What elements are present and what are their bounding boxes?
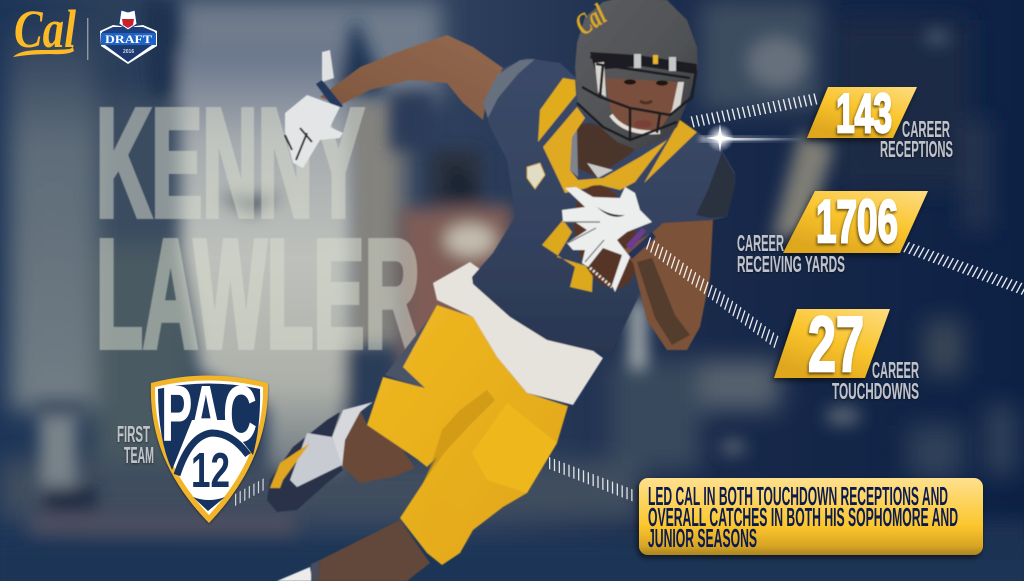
label career receiving yards (737, 230, 845, 277)
callout text (648, 481, 958, 553)
infographic canvas: CAREER (872, 357, 919, 383)
laces (590, 268, 612, 287)
label career touchdowns (832, 357, 919, 404)
label career receiving yards: RECEIVING YARDS (737, 251, 845, 277)
label career touchdowns: TOUCHDOWNS (832, 378, 919, 404)
dashed connector: receptions (692, 98, 820, 122)
stat: 143 career receptions (807, 82, 953, 162)
navy field (158, 384, 260, 470)
wristband (316, 80, 343, 110)
dashed connector: callout (549, 463, 635, 496)
helmet visor band (590, 52, 697, 74)
football (563, 178, 649, 296)
face (605, 78, 678, 133)
Pac-12 chest patch (527, 163, 545, 189)
right arm (623, 220, 713, 350)
12 numeral: 12 (191, 444, 230, 498)
cleat upper (290, 433, 342, 487)
left eye (624, 79, 636, 85)
mouth (634, 120, 652, 128)
player name: KENNY (96, 77, 364, 249)
back sock band (311, 560, 320, 581)
yellow shoulder panel left (538, 78, 576, 142)
number 1706: 1706 (816, 188, 898, 255)
callout text: JUNIOR SEASONS (648, 523, 757, 553)
label career receptions: CAREER (902, 116, 950, 142)
back shin (318, 520, 430, 581)
logo divider (87, 18, 88, 60)
cleat swoosh (270, 443, 310, 488)
collar (568, 130, 578, 177)
Cal logo: Cal (14, 0, 76, 59)
front shin (342, 410, 415, 483)
right eye (656, 80, 668, 86)
badge 143 (807, 87, 917, 138)
label career receiving yards: CAREER (737, 230, 784, 256)
player name (96, 77, 420, 380)
glove tab (322, 50, 334, 82)
badge 1706 (783, 191, 928, 253)
yellow pants (367, 305, 568, 565)
yellow chest panel (543, 107, 667, 193)
tattoo (637, 258, 690, 345)
captain C (653, 55, 658, 64)
stat: 27 career touchdowns (774, 300, 919, 404)
knee pad (421, 501, 465, 549)
shoulder camo right (696, 152, 735, 218)
hip pad (472, 403, 557, 493)
cleat (267, 412, 343, 512)
number 143: 143 (836, 82, 892, 144)
helmet padding right (668, 82, 684, 114)
helmet padding (595, 62, 606, 97)
raised arm (320, 35, 503, 120)
first team label: FIRST (117, 421, 150, 447)
undershirt (433, 262, 603, 405)
nose (640, 101, 652, 103)
wristband navy (628, 232, 656, 259)
dashed connector: receiving yards (906, 247, 1024, 293)
bottom chevron (193, 497, 225, 511)
badge 27 (774, 309, 890, 378)
yellow right shoulder panel (644, 120, 697, 183)
Pac-12 shield (151, 369, 268, 523)
front sock (332, 402, 373, 467)
NFL Draft shield logo: 2016 (123, 49, 134, 55)
neck (570, 123, 640, 177)
first team label (117, 421, 154, 468)
undershirt collar (587, 163, 613, 178)
helmet (575, 0, 698, 150)
chin strap (611, 115, 660, 132)
callout box (639, 478, 983, 555)
back sock (277, 567, 312, 581)
infographic canvas: TEAM (124, 442, 154, 468)
NFL Draft shield logo (100, 10, 157, 64)
shoulder camo left (483, 59, 535, 118)
player photo illustration (267, 0, 735, 581)
dashed connector: touchdowns (648, 243, 778, 344)
jersey torso (472, 58, 735, 355)
jersey number (542, 220, 593, 292)
PAC wordmark: PAC (161, 369, 257, 458)
arch (177, 433, 248, 475)
label career receptions (880, 116, 953, 162)
pants crease (423, 390, 495, 483)
glove finger lines (563, 222, 604, 262)
glove detail (285, 128, 312, 160)
NFL Draft shield logo: DRAFT (105, 32, 152, 46)
helmet clips (634, 54, 676, 71)
facemask (577, 57, 697, 140)
number 27: 27 (808, 300, 864, 388)
glove raised hand (285, 95, 343, 168)
glove swoosh (597, 207, 625, 217)
lens flare (700, 124, 805, 152)
infographic canvas: LAWLER (96, 208, 420, 380)
glove on ball (562, 187, 652, 292)
wristbands (626, 228, 646, 250)
dashed connector: first team (235, 483, 267, 500)
grey pants side (385, 307, 438, 388)
stat: 1706 career receiving yards (737, 188, 928, 277)
